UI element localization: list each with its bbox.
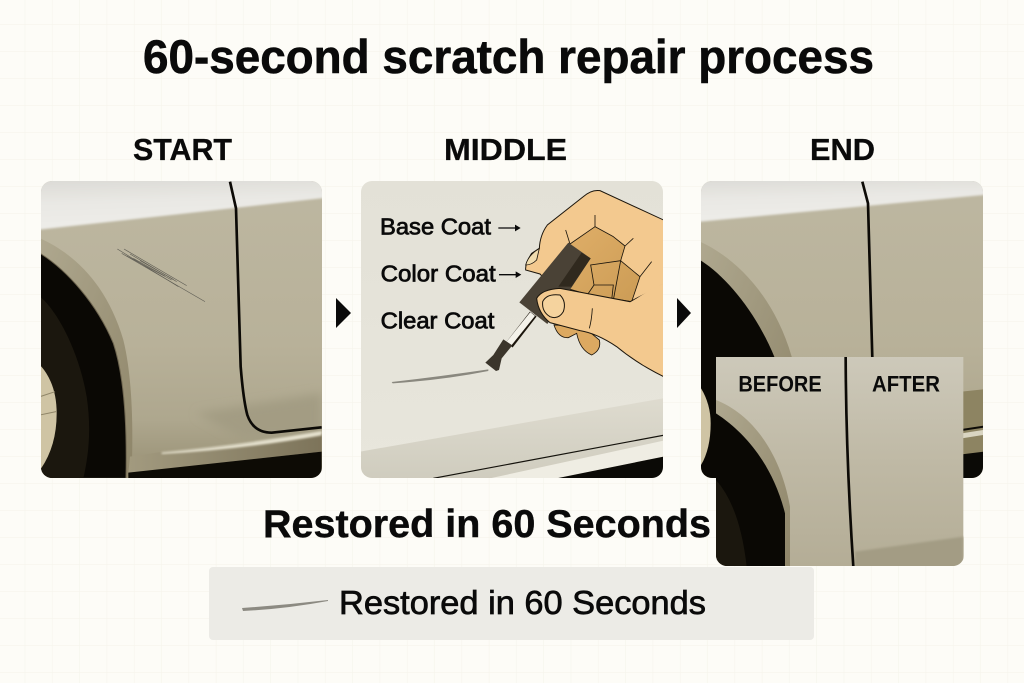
arrow: middle to end <box>677 298 691 328</box>
label: after: AFTER <box>872 372 940 397</box>
brush tip <box>485 339 512 371</box>
banner background <box>209 567 814 640</box>
wheel arch lip <box>700 242 792 480</box>
caption: Restored in 60 Seconds <box>263 503 711 546</box>
panel: middle illustration of touch-up pen <box>360 180 665 480</box>
wheel arch lip <box>40 238 132 478</box>
pen stem highlight <box>509 314 533 344</box>
wheel arch opening <box>700 260 775 480</box>
sill shadow <box>962 452 983 480</box>
tyre <box>716 480 747 567</box>
panel: start photo with scratched car door <box>41 181 322 478</box>
inset surface <box>716 357 963 567</box>
sill highlight <box>162 431 322 454</box>
scratch marks <box>117 249 205 302</box>
wheel rim <box>700 387 711 467</box>
heading: end: END <box>810 132 875 167</box>
banner text: Restored in 60 Seconds <box>339 584 706 621</box>
lower fingers <box>554 325 600 355</box>
thumbnail <box>543 295 564 318</box>
thumb crease <box>589 308 592 328</box>
lower reflection <box>210 396 320 430</box>
sill shadow <box>557 457 663 480</box>
arrow: start to middle <box>336 298 351 328</box>
arrow: color coat <box>499 271 521 278</box>
lower body tone <box>855 537 963 577</box>
arch opening <box>716 413 785 567</box>
title: 60-second scratch repair process <box>143 30 874 83</box>
fingers shaded <box>567 227 640 302</box>
wheel arch opening <box>40 253 126 478</box>
hand back <box>525 190 663 300</box>
label: base coat: Base Coat <box>380 213 492 239</box>
sill lower tone <box>128 433 322 473</box>
label: clear coat: Clear Coat <box>381 308 495 334</box>
banner scratch icon <box>242 600 328 611</box>
car body <box>700 180 983 480</box>
sill line <box>962 427 983 430</box>
inset: before and after comparison <box>716 357 963 577</box>
hand right fill <box>632 284 663 367</box>
arch lip <box>716 400 790 567</box>
pen stem <box>509 314 533 345</box>
lower body tone <box>962 389 983 455</box>
sill trim <box>490 441 663 478</box>
thumb <box>537 283 665 377</box>
heading: middle: MIDDLE <box>444 132 567 167</box>
label: before: BEFORE <box>738 372 822 397</box>
wheel rim spoke <box>40 392 56 415</box>
window reflection band <box>690 170 990 223</box>
car body <box>40 180 323 480</box>
panel surface <box>361 181 663 452</box>
sill shadow <box>128 452 322 480</box>
door gap line <box>230 182 322 433</box>
label: color coat: Color Coat <box>381 260 496 286</box>
lower door band <box>360 398 663 480</box>
fingernail <box>526 248 539 265</box>
wheel rim <box>40 365 57 470</box>
panel: end photo of repaired door <box>690 170 990 480</box>
divider door line <box>846 357 853 567</box>
door gap line <box>862 182 872 358</box>
tyre <box>40 297 89 478</box>
window reflection band <box>41 181 322 230</box>
pen side shade <box>558 253 591 287</box>
hand <box>525 190 663 356</box>
door line <box>433 435 663 478</box>
heading: start: START <box>133 132 232 167</box>
finger creases <box>566 215 652 300</box>
banner <box>209 567 814 640</box>
touch-up pen body <box>519 243 591 324</box>
arrow: base coat <box>498 225 521 231</box>
sill highlight <box>962 430 983 438</box>
painted scratch <box>392 369 488 383</box>
